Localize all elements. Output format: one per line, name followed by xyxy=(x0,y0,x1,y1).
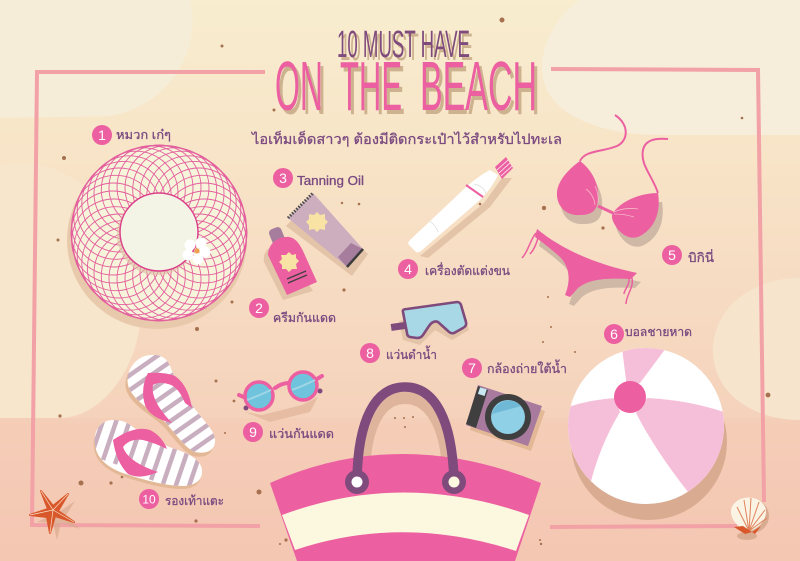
bikini shadow xyxy=(539,170,663,306)
title: BEACH xyxy=(420,47,537,125)
item 1: hat xyxy=(67,145,247,329)
title line 2: ON xyxy=(275,47,323,125)
label 9: แว่นกันแดด xyxy=(269,427,334,441)
title line 2: ON xyxy=(278,51,326,129)
title line 1: 10 MUST HAVE xyxy=(337,24,470,66)
label 1: 1 xyxy=(98,127,106,143)
bikini bottom xyxy=(535,229,637,297)
label 9: 9 xyxy=(249,424,257,440)
label 7: 7 xyxy=(468,360,476,376)
top flip flop xyxy=(126,354,216,457)
label 10: 10 xyxy=(142,492,156,506)
label 5: 5 xyxy=(668,247,676,263)
label 2 xyxy=(249,298,336,325)
label 10 xyxy=(139,489,224,509)
label 8: 8 xyxy=(366,345,374,361)
starfish xyxy=(30,491,80,540)
item 5: bikini xyxy=(522,115,668,306)
title line 1 xyxy=(337,24,473,69)
bottom flip flop xyxy=(94,420,202,489)
bag handle shadow xyxy=(364,398,448,470)
item 8: goggles xyxy=(391,302,469,345)
label 4: 4 xyxy=(404,261,412,277)
title line 2: THE xyxy=(340,47,402,125)
label 4 xyxy=(398,259,510,279)
label 1 xyxy=(92,125,171,145)
label 4: เครื่องตัดแต่งขน xyxy=(425,262,510,278)
label 8: แว่นดำน้ำ xyxy=(386,345,437,362)
label 2: 2 xyxy=(255,300,263,316)
label 3: 3 xyxy=(279,170,287,186)
label 6: 6 xyxy=(610,326,618,342)
item 7: camera xyxy=(466,385,545,451)
title: BEACH xyxy=(423,51,540,129)
label 5: บิกินี่ xyxy=(688,249,714,265)
label 8 xyxy=(360,343,437,363)
label 6: บอลชายหาด xyxy=(625,325,692,339)
label 3: Tanning Oil xyxy=(297,174,364,188)
item 3: tanning oil tube xyxy=(286,193,368,276)
item 6: beach ball xyxy=(568,348,727,520)
item 2: sunscreen bottle xyxy=(264,226,317,300)
flower xyxy=(182,238,210,264)
item: beach bag xyxy=(270,387,541,561)
title xyxy=(251,24,562,147)
item 9: sunglasses xyxy=(239,372,322,422)
label 7 xyxy=(462,358,567,378)
bikini top xyxy=(557,161,598,215)
title line 2 xyxy=(275,47,540,129)
label 3 xyxy=(273,168,364,188)
bag body xyxy=(270,454,541,561)
title line 2: THE xyxy=(343,51,405,129)
label 10: รองเท้าแตะ xyxy=(165,494,224,508)
bag stripe xyxy=(282,492,529,551)
title: 10 MUST HAVE xyxy=(340,27,473,69)
label 1: หมวก เก๋ๆ xyxy=(116,128,171,142)
label 9 xyxy=(243,422,334,442)
label 7: กล้องถ่ายใต้น้ำ xyxy=(487,359,567,376)
label 6 xyxy=(604,324,692,344)
subtitle: ไอเท็มเด็ดสาวๆ ต้องมีติดกระเป๋าไว้สำหรับไปทะเล xyxy=(251,130,562,147)
item 4: trimmer xyxy=(408,157,513,258)
bag handle xyxy=(357,387,454,480)
seashell xyxy=(731,498,769,540)
hat weave xyxy=(71,145,247,321)
item 10: flip flops xyxy=(94,354,216,489)
label 2: ครีมกันแดด xyxy=(273,311,336,325)
label 5 xyxy=(662,245,714,265)
frame lines xyxy=(32,69,764,527)
